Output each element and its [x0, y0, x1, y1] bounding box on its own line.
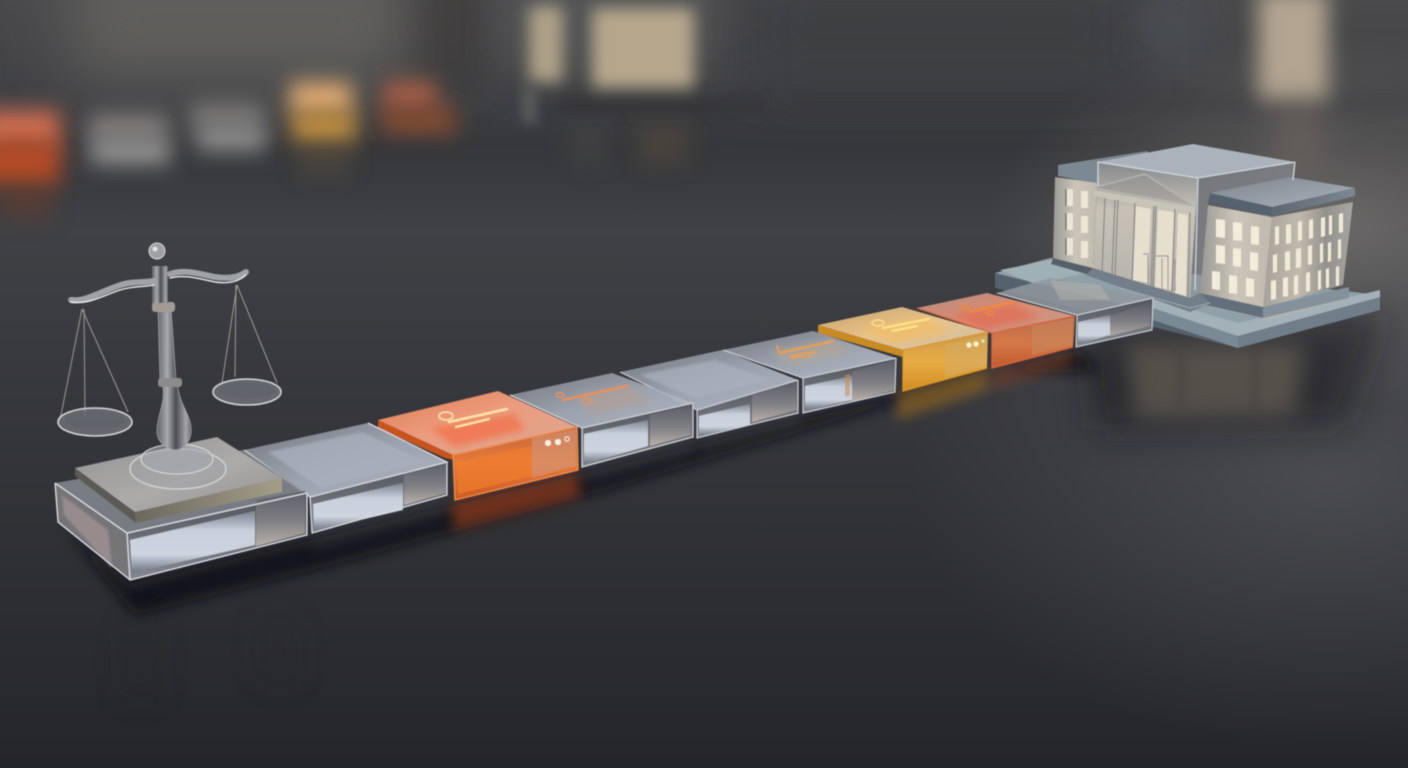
icon: status dots — [966, 339, 985, 348]
columns — [1102, 198, 1190, 297]
courthouse platform — [995, 258, 1380, 348]
right pan — [213, 285, 281, 405]
central portico — [1086, 144, 1295, 312]
glass block 3: orange — [378, 391, 578, 500]
scale column — [149, 243, 191, 450]
scale beam — [71, 272, 246, 303]
icon: glowing lines on amber tile — [872, 319, 929, 331]
courthouse building — [1051, 144, 1355, 318]
windows: left wing — [1066, 189, 1088, 258]
glass block 1: scale base — [55, 450, 307, 580]
shadow and reflections on floor — [62, 312, 1385, 695]
metal plate under scales — [75, 437, 282, 523]
steps — [1086, 268, 1210, 312]
glass block 7: amber — [818, 307, 988, 391]
glass block 8: red — [917, 293, 1075, 368]
glass block 5 — [620, 350, 798, 438]
glass block 9 — [997, 278, 1153, 347]
right wing — [1200, 177, 1355, 318]
glass block 4 — [510, 373, 693, 467]
blurred background blocks — [0, 0, 1328, 220]
icon: glowing lines on red tile — [962, 302, 1013, 315]
icon: status dots — [545, 437, 569, 446]
doors — [1143, 254, 1175, 291]
windows: right wing side — [1271, 213, 1343, 300]
scales of justice — [58, 243, 281, 489]
left wing — [1051, 151, 1165, 276]
windows: right wing front — [1212, 219, 1259, 297]
icon: glowing lines on orange tile — [439, 409, 507, 427]
scale foot — [130, 444, 226, 489]
pediment — [1093, 174, 1194, 206]
left pan — [58, 309, 132, 436]
icon: glowing lines on glass tile — [556, 386, 627, 404]
foreground objects — [55, 144, 1380, 580]
glass block 2 — [244, 423, 447, 533]
icon: glowing lines on glass tile — [777, 341, 833, 358]
glass block 6 — [723, 331, 896, 413]
